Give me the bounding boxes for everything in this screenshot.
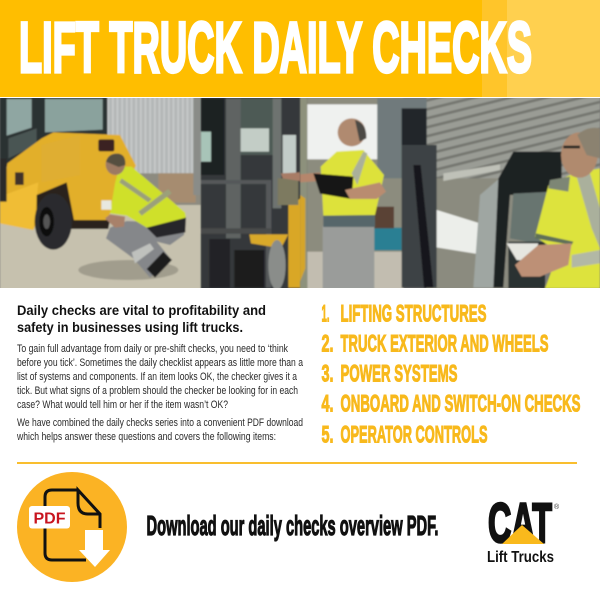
logo: CAT Lift Trucks: CAT [488, 491, 552, 554]
photo strip: operators checking lift trucks [0, 95, 600, 292]
numbered checklist: LIFTING STRUCTURES [340, 300, 486, 328]
body text paragraphs: which helps answer these questions and covers the following items: [16, 431, 276, 443]
numbered checklist: 1. [322, 300, 330, 328]
body text paragraphs: To gain full advantage from daily or pre-shift checks, you need to ‘think [17, 343, 288, 355]
body text paragraphs: tick. But what signs of a problem should the checker be looking for in each [17, 385, 298, 397]
body text paragraphs [16, 343, 304, 443]
numbered checklist: POWER SYSTEMS [340, 360, 458, 388]
numbered checklist [322, 300, 580, 448]
numbered checklist: 5. [322, 422, 334, 448]
body text paragraphs: case? What would tell him or her if the item wasn’t OK? [17, 399, 228, 411]
numbered checklist: 3. [322, 360, 334, 388]
logo: CAT Lift Trucks: Lift Trucks [487, 549, 554, 566]
photo: operator crouching beside yellow truck [0, 95, 201, 292]
logo: CAT Lift Trucks [487, 491, 560, 566]
intro heading: Daily checks are vital to profitability and [17, 302, 266, 318]
body text paragraphs: list of systems and components. If an item looks OK, the checker gives it a [17, 371, 298, 383]
header banner [0, 0, 600, 97]
intro heading [17, 302, 266, 335]
logo: CAT Lift Trucks: ® [554, 503, 560, 511]
numbered checklist: 4. [322, 390, 334, 418]
photo: mast and man with clipboard [200, 98, 301, 288]
icon: PDF download: PDF [34, 510, 66, 528]
intro heading: safety in businesses using lift trucks. [17, 319, 243, 335]
body text paragraphs: before you tick’. Sometimes the daily checklist appears as little more than a [17, 357, 304, 369]
icon: PDF download [17, 472, 127, 582]
body text paragraphs: We have combined the daily checks series into a convenient PDF download [17, 417, 303, 429]
numbered checklist: 2. [322, 330, 334, 358]
